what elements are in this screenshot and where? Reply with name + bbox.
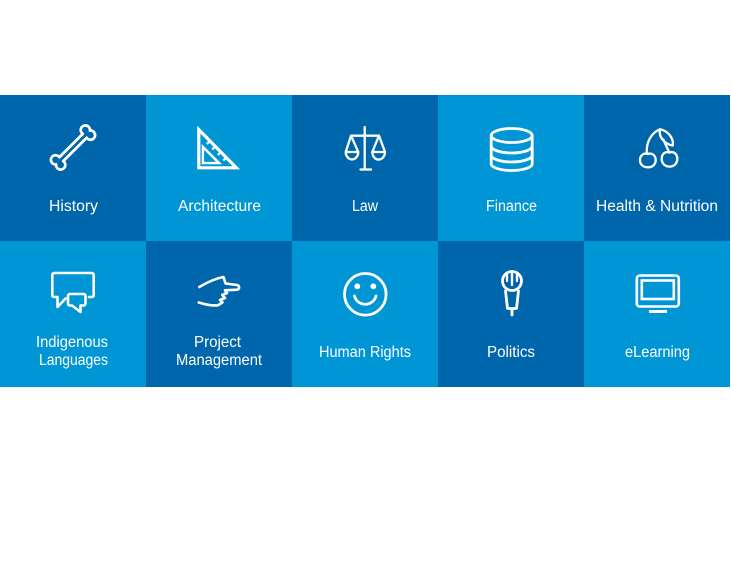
panel: Human Rights — [292, 241, 438, 387]
label: Architecture: Architecture — [178, 198, 261, 215]
label: Project Management — [176, 334, 263, 369]
icon: microphone — [502, 272, 522, 315]
icon: speech bubbles — [52, 273, 94, 312]
label: Project Management: Management — [176, 352, 263, 369]
label: Finance: Finance — [486, 198, 537, 215]
label: Project Management: Project — [194, 334, 242, 351]
label: Human Rights: Human Rights — [319, 344, 411, 361]
icon: bone — [49, 124, 97, 171]
label: Indigenous Languages: Indigenous — [36, 334, 108, 351]
panel: Architecture — [146, 95, 292, 241]
label: eLearning: eLearning — [625, 344, 690, 361]
icon: pointing hand — [199, 277, 239, 305]
panel: Finance — [438, 95, 584, 241]
icon: scales — [346, 127, 385, 170]
panel: Project Management — [146, 241, 292, 387]
label: Law: Law — [352, 198, 379, 215]
label: Indigenous Languages: Languages — [39, 352, 108, 369]
panel: Law — [292, 95, 438, 241]
panel: History — [0, 95, 146, 241]
icon: coin stack — [491, 128, 532, 170]
label: History: History — [49, 198, 98, 215]
icon: cherries — [640, 129, 677, 167]
icon: monitor — [637, 276, 679, 313]
panel: Politics — [438, 241, 584, 387]
label: Politics: Politics — [487, 344, 535, 361]
icon: set square — [199, 130, 236, 168]
icon: smiley face — [344, 274, 386, 315]
label: Indigenous Languages — [36, 334, 108, 369]
panel: eLearning — [584, 241, 730, 387]
panel: Health & Nutrition — [584, 95, 730, 241]
label: Health & Nutrition: Health & Nutrition — [596, 198, 718, 215]
panel: Indigenous Languages — [0, 241, 146, 387]
